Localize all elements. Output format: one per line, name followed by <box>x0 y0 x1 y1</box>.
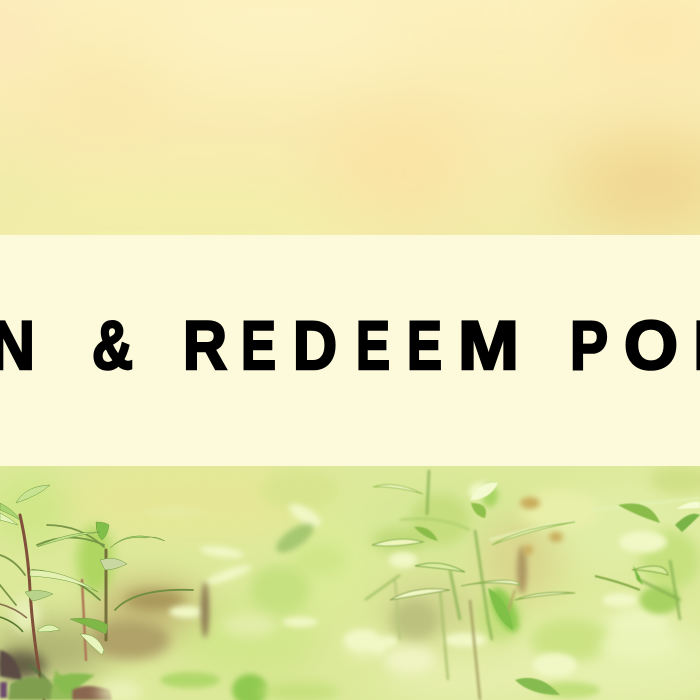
right side stems and leaves <box>365 470 700 700</box>
title: EARN & REDEEM POINTS (cropped): M <box>458 307 519 384</box>
banner band <box>0 235 700 466</box>
mottled mid-distance foliage <box>0 466 700 679</box>
leaves <box>0 485 165 655</box>
title: EARN & REDEEM POINTS (cropped): & <box>92 307 133 384</box>
mid-distance blurred leaves <box>145 479 667 677</box>
foreground plant at left <box>0 485 193 700</box>
photo: blurred green plants <box>0 465 700 700</box>
soft background colour patches <box>0 465 700 700</box>
near-camera foreground haze <box>98 631 680 700</box>
title: EARN & REDEEM POINTS (cropped): O <box>624 307 678 384</box>
title: EARN & REDEEM POINTS (cropped): D <box>293 307 337 384</box>
background: warm blurred sky <box>0 0 700 235</box>
title: EARN & REDEEM POINTS (cropped): E <box>356 307 390 384</box>
title: EARN & REDEEM POINTS (cropped) <box>0 307 700 384</box>
title: EARN & REDEEM POINTS (cropped): E <box>241 307 276 384</box>
title: EARN & REDEEM POINTS (cropped): P <box>570 307 608 384</box>
title: EARN & REDEEM POINTS (cropped): E <box>407 307 442 384</box>
ground foliage <box>0 650 112 700</box>
title: EARN & REDEEM POINTS (cropped): R <box>183 307 227 384</box>
